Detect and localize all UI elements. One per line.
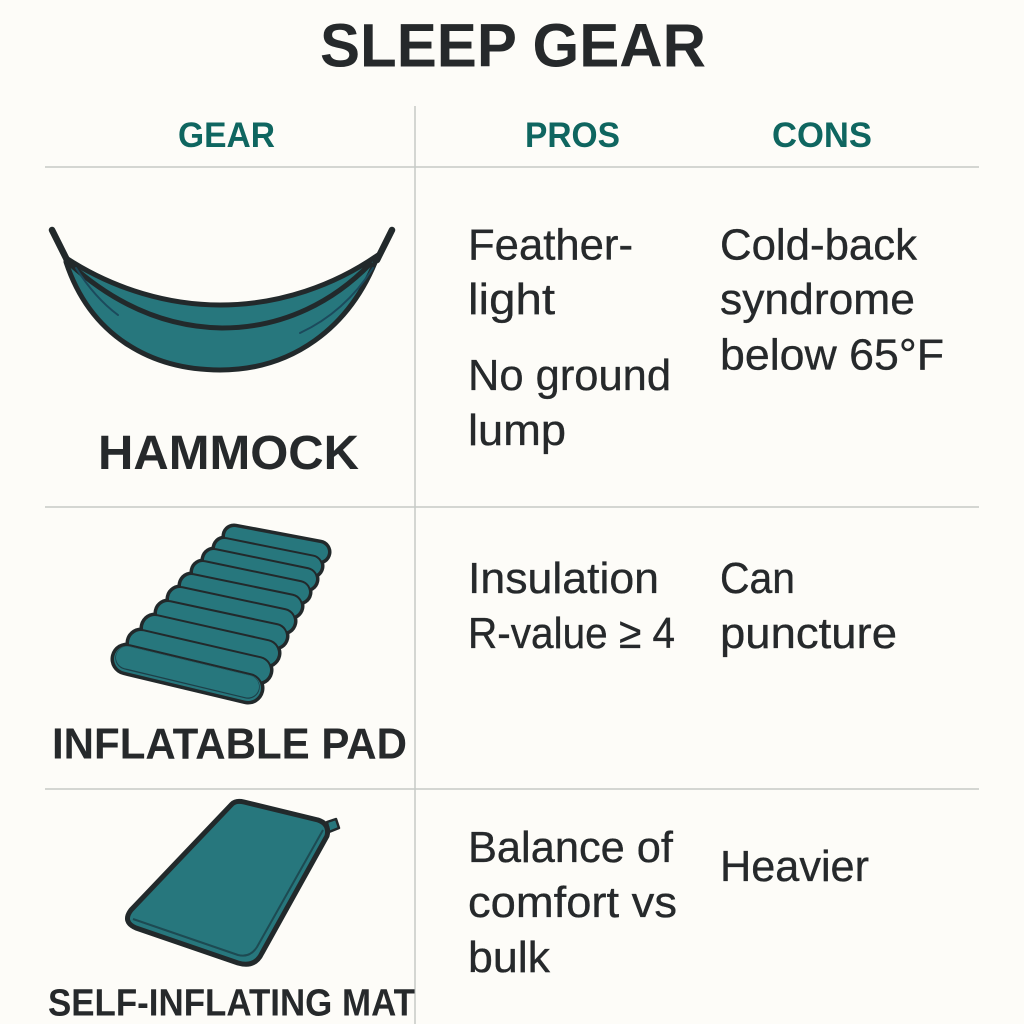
title: SLEEP GEAR xyxy=(320,12,706,80)
header: cons: CONS xyxy=(772,116,872,155)
pros: self-inflating mat: bulk xyxy=(468,933,551,982)
pros: hammock: Feather- xyxy=(468,220,633,270)
pros: inflatable pad: R-value ≥ 4 xyxy=(468,609,675,658)
pros: self-inflating mat: comfort vs xyxy=(468,878,677,927)
pros: self-inflating mat xyxy=(468,823,677,982)
header: gear: GEAR xyxy=(178,116,275,155)
cons: inflatable pad xyxy=(720,554,897,658)
row: hammock xyxy=(52,220,944,480)
cons: hammock: syndrome xyxy=(720,275,915,324)
icon: self-inflating mat xyxy=(127,801,339,964)
label: self-inflating mat: SELF-INFLATING MAT xyxy=(48,982,415,1024)
label: hammock: HAMMOCK xyxy=(98,427,359,480)
icon: inflatable pad xyxy=(127,536,319,688)
header: pros: PROS xyxy=(525,116,620,155)
cons: self-inflating mat: Heavier xyxy=(720,842,869,891)
pros: hammock: No ground xyxy=(468,351,671,400)
cons: hammock: below 65°F xyxy=(720,330,944,380)
label: inflatable pad: INFLATABLE PAD xyxy=(52,720,407,768)
cons: hammock: Cold-back xyxy=(720,220,918,270)
cons: inflatable pad: puncture xyxy=(720,609,897,658)
row: inflatable pad xyxy=(52,536,897,768)
row: self-inflating mat xyxy=(48,801,869,1024)
pros: inflatable pad xyxy=(468,554,675,658)
pros: hammock xyxy=(468,220,671,455)
pros: inflatable pad: Insulation xyxy=(468,554,659,603)
cons: hammock xyxy=(720,220,944,380)
pros: hammock: lump xyxy=(468,406,566,455)
pros: hammock: light xyxy=(468,275,555,324)
icon: hammock xyxy=(52,230,392,370)
pros: self-inflating mat: Balance of xyxy=(468,823,674,872)
cons: inflatable pad: Can xyxy=(720,554,795,603)
column headers xyxy=(178,116,872,155)
